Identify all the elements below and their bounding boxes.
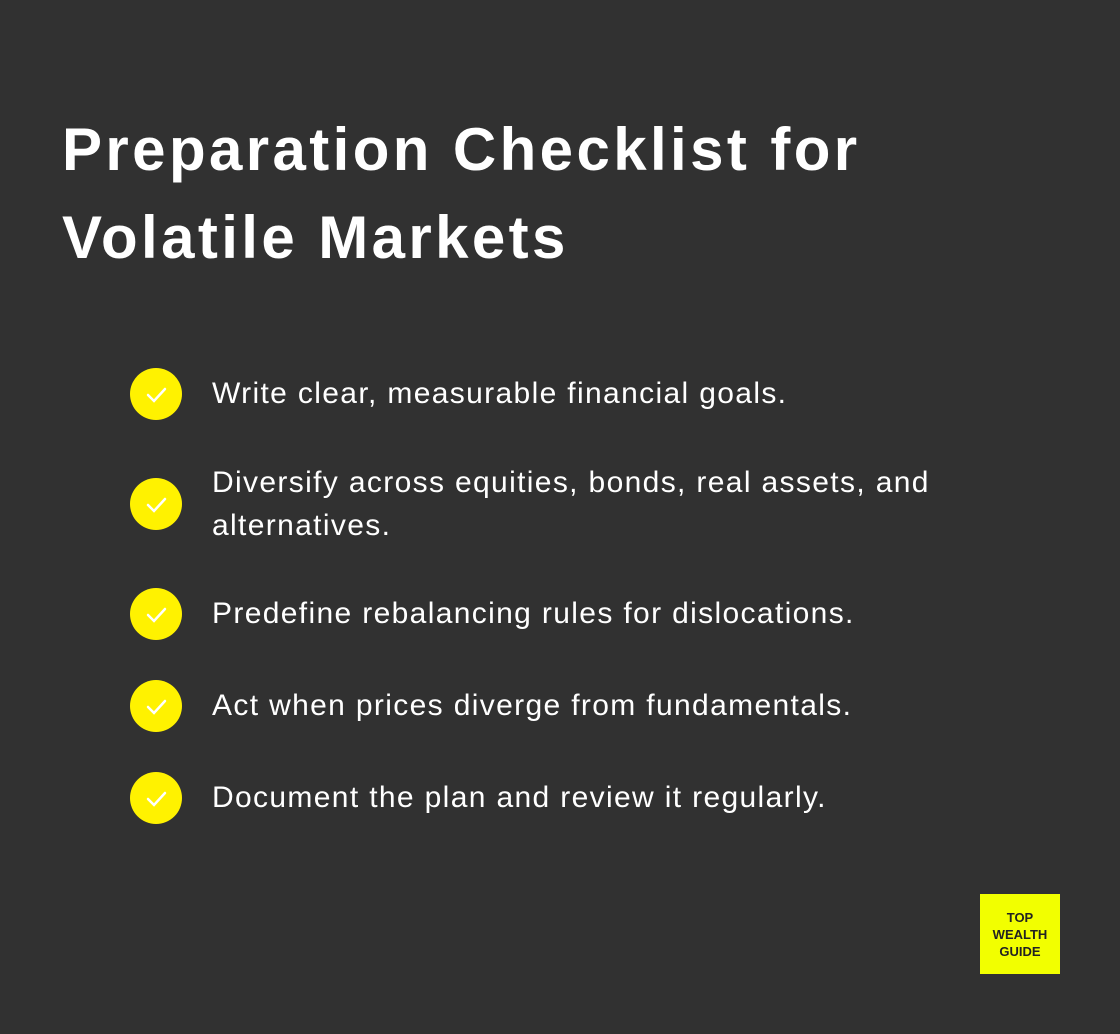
text 3: Predefine rebalancing rules for dislocations.: [212, 597, 855, 630]
icon: check 5: [130, 772, 182, 824]
title: Volatile Markets: [62, 204, 569, 271]
icon: check 3: [130, 588, 182, 640]
checklist item 5: [130, 772, 827, 824]
logo: [980, 894, 1060, 974]
checklist item 4: [130, 680, 852, 732]
text 4: Act when prices diverge from fundamentals.: [212, 689, 852, 722]
text 2: [212, 466, 930, 542]
logo: WEALTH: [993, 926, 1047, 942]
text 2: alternatives.: [212, 509, 391, 542]
icon: check 4: [130, 680, 182, 732]
title: [62, 116, 861, 271]
checklist item 2: [130, 466, 930, 542]
logo: GUIDE: [999, 944, 1041, 958]
text 2: Diversify across equities, bonds, real assets, and: [212, 466, 930, 499]
logo: TOP: [1007, 910, 1033, 924]
icon: check 1: [130, 368, 182, 420]
text 1: Write clear, measurable financial goals.: [212, 377, 787, 410]
checklist item 1: [130, 368, 787, 420]
title: Preparation Checklist for: [62, 116, 861, 183]
text 5: Document the plan and review it regularly.: [212, 781, 827, 814]
checklist item 3: [130, 588, 855, 640]
icon: check 2: [130, 478, 182, 530]
